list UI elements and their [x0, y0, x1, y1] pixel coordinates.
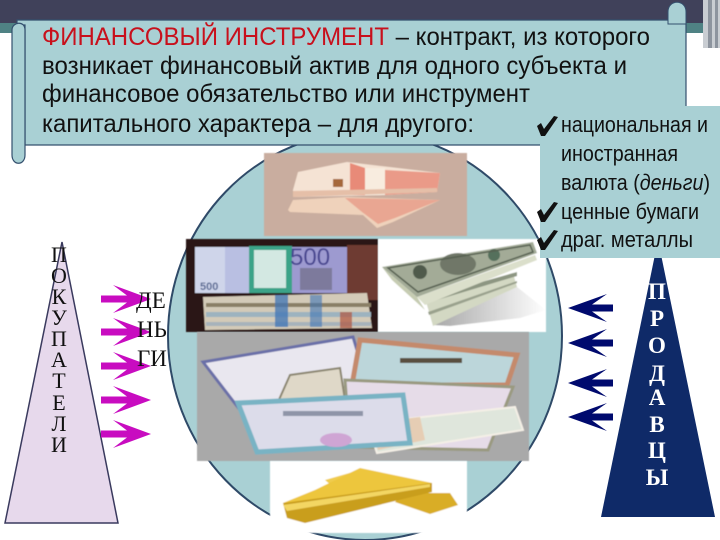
money label — [136, 288, 167, 371]
buyers vertical label: Т — [52, 368, 66, 393]
definition scroll banner — [12, 2, 686, 163]
money label: НЬ — [137, 317, 167, 342]
header band — [0, 0, 720, 48]
buyers vertical label: К — [52, 284, 67, 309]
buyers vertical label: А — [51, 347, 67, 372]
list text: ценные бумаги — [561, 199, 699, 224]
photo: euro banknotes — [186, 239, 378, 332]
buyers triangle — [5, 242, 118, 523]
money label: ДЕ — [136, 288, 166, 313]
sellers vertical label — [646, 279, 669, 490]
teal circle — [168, 132, 562, 540]
sellers vertical label: А — [649, 385, 666, 410]
sellers vertical label: Р — [650, 306, 664, 331]
list panel: instrument types — [537, 106, 720, 258]
sellers vertical label: Д — [649, 361, 665, 386]
buyers vertical label: У — [51, 305, 67, 330]
buyers vertical label: И — [51, 432, 67, 457]
photo: dollar banknotes — [378, 239, 546, 332]
sellers vertical label: Ц — [648, 438, 666, 463]
magenta arrows to the right — [101, 285, 151, 448]
definition text: финансовое обязательство или инструмент — [42, 80, 531, 108]
buyers vertical label: П — [51, 326, 67, 351]
buyers vertical label — [51, 242, 67, 457]
sellers vertical label: В — [649, 412, 665, 437]
definition text: ФИНАНСОВЫЙ ИНСТРУМЕНТ – контракт, из которого — [42, 21, 650, 51]
list text: драг. металлы — [561, 227, 693, 252]
definition text: возникает финансовый актив для одного субъекта и — [42, 52, 627, 80]
photo: securities certificates — [197, 332, 529, 461]
buyers vertical label: О — [51, 263, 67, 288]
buyers vertical label: Е — [52, 390, 66, 415]
sellers vertical label: О — [648, 333, 666, 358]
photo: ruble banknotes — [264, 153, 467, 236]
sellers vertical label: П — [648, 279, 666, 304]
definition text: капитального характера – для другого: — [42, 110, 474, 138]
photo: euro banknotes: 500 — [290, 244, 330, 271]
money label: ГИ — [137, 346, 167, 371]
buyers vertical label: Л — [52, 411, 67, 436]
definition text — [42, 21, 650, 138]
photo: euro banknotes: 500 — [200, 281, 218, 293]
sellers triangle — [601, 240, 715, 517]
sellers vertical label: Ы — [646, 465, 669, 490]
list text: иностранная — [561, 141, 678, 166]
buyers vertical label: П — [51, 242, 67, 267]
list text: валюта (деньги) — [561, 170, 710, 195]
photo: gold bars — [270, 461, 467, 533]
list text — [561, 112, 710, 252]
navy arrows to the left — [568, 294, 613, 431]
icon: check marks — [537, 116, 558, 250]
